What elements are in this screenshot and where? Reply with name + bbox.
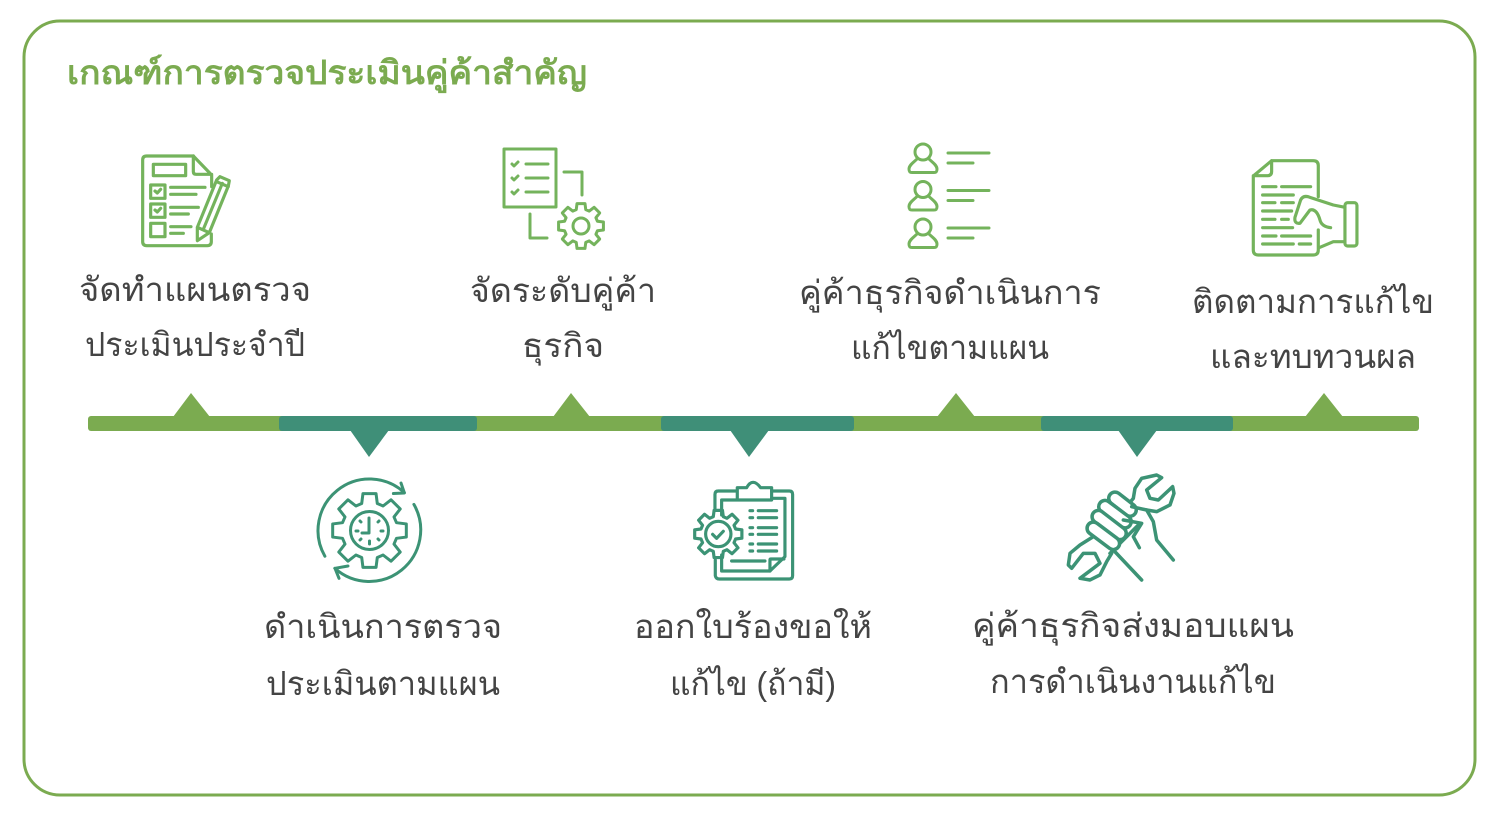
label: step 4: แก้ไข (ถ้ามี) — [670, 665, 836, 702]
label: step 3 — [470, 272, 656, 366]
label: step 1: ประเมินประจำปี — [85, 326, 305, 363]
icon: suppliers list — [909, 144, 989, 248]
label: step 5: คู่ค้าธุรกิจดำเนินการ — [799, 274, 1101, 313]
icon: checklist and gear — [504, 149, 603, 248]
icon: document and hand — [1253, 161, 1357, 255]
label: step 7: และทบทวนผล — [1210, 338, 1416, 375]
icon: checklist and pencil — [143, 156, 229, 246]
label: step 3: จัดระดับคู่ค้า — [470, 272, 656, 311]
label: step 4: ออกใบร้องขอให้ — [634, 608, 872, 645]
title: เกณฑ์การตรวจประเมินคู่ค้าสำคัญ — [67, 54, 587, 94]
label: step 1: จัดทำแผนตรวจ — [79, 271, 311, 308]
label: step 6: คู่ค้าธุรกิจส่งมอบแผน — [972, 607, 1294, 646]
label: step 7 — [1192, 283, 1434, 375]
label: step 2 — [264, 608, 502, 702]
label: step 6: การดำเนินงานแก้ไข — [990, 663, 1276, 700]
icon: clipboard and gear — [695, 482, 793, 579]
timeline — [88, 393, 1419, 457]
label: step 3: ธุรกิจ — [522, 327, 604, 366]
label: step 4 — [634, 608, 872, 702]
label: step 5: แก้ไขตามแผน — [851, 329, 1049, 366]
icon: hand holding wrench — [1068, 475, 1174, 580]
label: step 5 — [799, 274, 1101, 366]
label: step 2: ประเมินตามแผน — [266, 665, 500, 702]
icon: gear clock cycle — [318, 479, 421, 581]
label: step 2: ดำเนินการตรวจ — [264, 608, 502, 645]
label: step 6 — [972, 607, 1294, 700]
label: step 7: ติดตามการแก้ไข — [1192, 283, 1434, 320]
label: step 1 — [79, 271, 311, 363]
